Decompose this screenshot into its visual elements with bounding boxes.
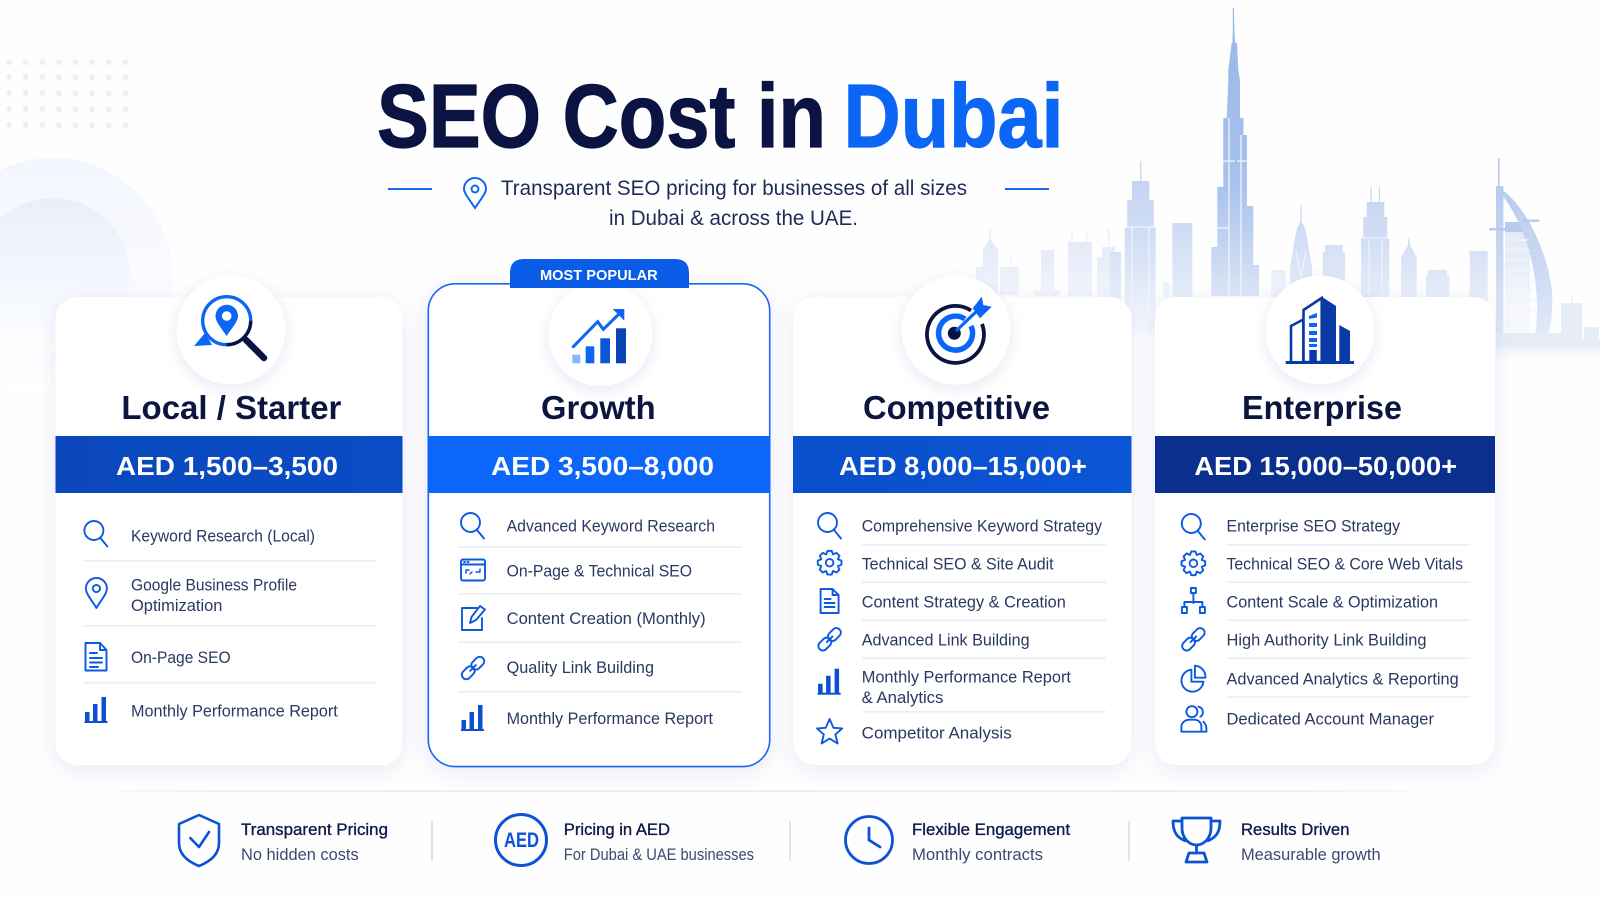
list item: Content Scale and Optimization: Content Scale & Optimization <box>1226 594 1438 612</box>
panel: Enterprise <box>1155 276 1495 765</box>
list item: Content Creation <box>462 606 706 630</box>
list item: Enterprise SEO Strategy <box>1182 514 1401 540</box>
list item: Quality Link Building: Quality Link Building <box>507 659 654 677</box>
benefit: Transparent Pricing <box>179 815 388 866</box>
icon: location pin <box>464 178 486 208</box>
list item: Advanced Keyword Research <box>461 513 715 538</box>
list item: High Authority Link Building <box>1180 626 1426 652</box>
list item: Comprehensive Keyword Strategy: Comprehensive Keyword Strategy <box>862 518 1103 536</box>
benefit: Pricing in AED: For Dubai & UAE businesses <box>564 846 754 864</box>
list item: Monthly Performance Report <box>84 697 338 723</box>
list item: Technical SEO and Site Audit <box>818 551 1054 575</box>
benefit: Flexible Engagement: Flexible Engagement <box>912 820 1070 839</box>
panel: Competitive <box>793 276 1132 765</box>
benefit: Transparent Pricing: Transparent Pricing <box>241 820 388 839</box>
list item: Enterprise SEO Strategy: Enterprise SEO Strategy <box>1226 518 1401 536</box>
price band <box>793 436 1132 493</box>
most popular tab <box>510 259 689 288</box>
price band: AED 3,500–8,000 <box>491 451 714 481</box>
list item: Competitor Analysis: Competitor Analysis <box>862 725 1012 743</box>
heading: Local / Starter <box>121 389 342 426</box>
list item: Monthly Performance Report and Analytics: & Analytics <box>862 689 943 707</box>
panel: Local / Starter <box>56 276 402 765</box>
list item: Monthly Performance Report: Monthly Performance Report <box>131 703 338 721</box>
list item: On-Page SEO: On-Page SEO <box>131 649 231 667</box>
list item: Advanced Analytics and Reporting <box>1181 666 1459 692</box>
subtitle with location pin: in Dubai & across the UAE. <box>609 206 858 230</box>
list item: Advanced Analytics and Reporting: Advanced Analytics & Reporting <box>1226 671 1459 689</box>
list item: Advanced Link Building <box>817 626 1030 652</box>
benefit: Results Driven: Results Driven <box>1241 820 1350 839</box>
list item: Keyword Research: Keyword Research (Local) <box>131 528 315 546</box>
bottom strip of benefits <box>179 814 1381 866</box>
decorative dot grid <box>6 59 128 128</box>
panel: Growth <box>428 259 770 767</box>
benefit: Transparent Pricing: No hidden costs <box>241 846 359 864</box>
icon: growth chart <box>548 282 652 386</box>
list item: Monthly Performance Report <box>461 705 713 731</box>
icon: location magnifier <box>176 276 286 384</box>
list item: Content Creation: Content Creation (Monthly) <box>507 610 706 628</box>
decorative circles <box>0 158 172 396</box>
list item: Technical SEO and Site Audit: Technical SEO & Site Audit <box>862 555 1054 573</box>
heading: Competitive <box>863 389 1050 426</box>
list item: On-Page SEO <box>86 643 231 670</box>
list item: Technical SEO and Core Web Vitals <box>1182 551 1463 575</box>
list item: Competitor Analysis <box>817 719 1012 744</box>
Dubai skyline illustration <box>976 8 1600 365</box>
list item: On-Page and Technical SEO: On-Page & Technical SEO <box>507 563 692 581</box>
list item: Advanced Keyword Research: Advanced Keyword Research <box>507 518 715 536</box>
title: SEO Cost in <box>377 67 826 167</box>
list item: Advanced Link Building: Advanced Link Building <box>862 632 1030 650</box>
list item: Keyword Research <box>84 521 315 546</box>
most popular tab: MOST POPULAR <box>540 267 658 284</box>
Burj Khalifa tower <box>1211 8 1259 296</box>
price band <box>428 436 770 493</box>
price band <box>1155 436 1495 493</box>
heading: Enterprise <box>1242 389 1402 426</box>
list item: Content Scale and Optimization <box>1182 588 1438 613</box>
benefit: Pricing in AED: Pricing in AED <box>564 820 670 839</box>
title: Dubai <box>844 67 1064 167</box>
list item: Content Strategy and Creation: Content Strategy & Creation <box>862 594 1066 612</box>
icon: office buildings <box>1266 276 1374 384</box>
price band: AED 15,000–50,000+ <box>1194 451 1457 481</box>
heading: Growth <box>541 389 656 426</box>
icon: trophy <box>1173 818 1220 862</box>
icon: clock <box>846 816 892 864</box>
list item: Technical SEO and Core Web Vitals: Technical SEO & Core Web Vitals <box>1226 555 1463 573</box>
icon: target with arrow <box>902 276 1010 384</box>
list item: High Authority Link Building: High Authority Link Building <box>1226 632 1426 650</box>
icon: AED coin: AED <box>504 829 539 852</box>
list item: On-Page and Technical SEO <box>461 560 692 581</box>
list item: Google Business Profile: Google Business Profile <box>131 577 297 595</box>
subtitle with location pin <box>388 176 1049 230</box>
benefit: Pricing in AED <box>496 814 754 866</box>
list item: Monthly Performance Report and Analytics <box>818 668 1071 707</box>
icon: shield <box>179 815 219 866</box>
list item: Monthly Performance Report: Monthly Performance Report <box>507 710 713 728</box>
price band <box>56 436 402 493</box>
list item: Quality Link Building <box>460 655 654 681</box>
subtitle with location pin: Transparent SEO pricing for businesses of all sizes <box>501 176 967 200</box>
price band: AED 1,500–3,500 <box>116 451 338 481</box>
benefit: Results Driven: Measurable growth <box>1241 846 1381 864</box>
list item: Google Business Profile <box>86 577 297 615</box>
benefit: Results Driven <box>1173 818 1381 864</box>
list item: Content Strategy and Creation <box>821 589 1066 613</box>
list item: Monthly Performance Report and Analytics: Monthly Performance Report <box>862 668 1071 686</box>
list item: Google Business Profile: Optimization <box>131 597 222 615</box>
list item: Dedicated Account Manager: Dedicated Account Manager <box>1226 710 1434 728</box>
Burj Al Arab hotel <box>1489 158 1600 365</box>
benefit: Flexible Engagement <box>846 816 1070 864</box>
icon: AED coin <box>496 814 546 866</box>
benefit: Flexible Engagement: Monthly contracts <box>912 846 1043 864</box>
price band: AED 8,000–15,000+ <box>839 451 1087 481</box>
list item: Comprehensive Keyword Strategy <box>818 513 1103 538</box>
list item: Dedicated Account Manager <box>1181 706 1434 732</box>
